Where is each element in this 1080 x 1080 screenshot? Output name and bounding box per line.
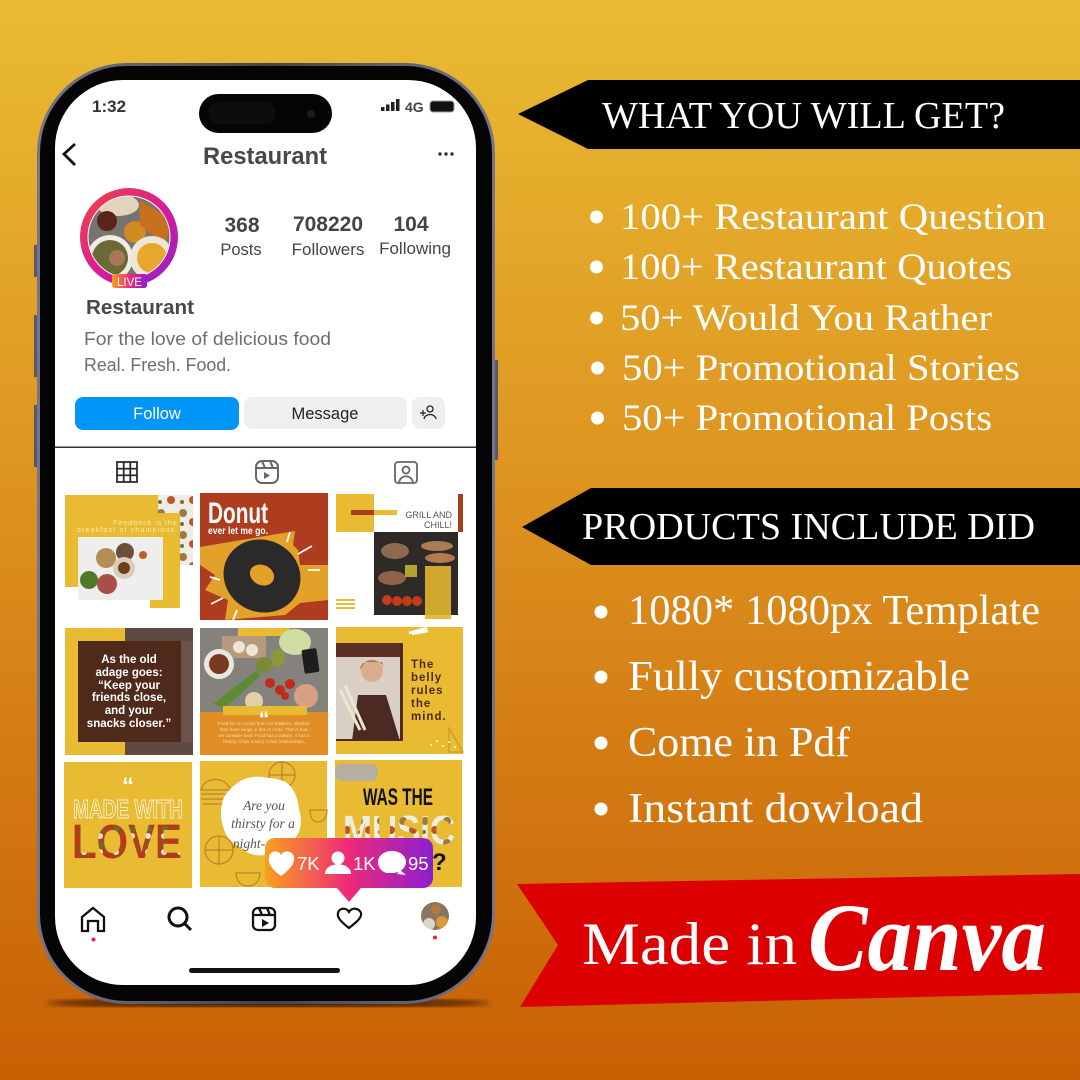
list: what you will get: 100+ Restaurant Question [620, 197, 1046, 238]
home indicator [189, 968, 340, 973]
post 5: food flat lay: we consider food. Food has a culture. It has a [218, 733, 310, 738]
followers count: 1K [353, 853, 376, 874]
tab icon: tagged [395, 462, 417, 483]
live badge: LIVE [117, 277, 142, 289]
status time: 1:32 [92, 97, 126, 116]
post 6: belly rules the mind: rules [411, 685, 444, 697]
bio: Real. Fresh. Food. [84, 355, 231, 375]
nav: search [169, 908, 191, 930]
banner: products include [522, 488, 1080, 565]
tab icon: reels [256, 461, 278, 483]
post 2: donut: ever let me go. [208, 525, 268, 537]
back chevron [64, 144, 75, 165]
list: products include: Instant dowload [628, 786, 923, 832]
bio: Restaurant [86, 297, 194, 319]
post 8: thirsty: thirsty for a [231, 816, 295, 831]
post 3: grill and chill [336, 493, 463, 620]
avatar [80, 188, 178, 289]
post 5: food flat lay: “ [259, 708, 269, 731]
post 3: grill and chill: CHILL! [424, 520, 452, 530]
post 2: donut: Donut [208, 497, 268, 530]
list: products include [594, 588, 1040, 832]
post 8: thirsty: Are you [242, 798, 285, 813]
post 8: thirsty: night- [233, 836, 266, 851]
follow button [75, 397, 239, 430]
profile title: Restaurant [203, 143, 327, 170]
post 7: made with love: “ [122, 773, 134, 800]
nav: profile avatar [420, 902, 450, 930]
post 7: made with love: LOVE [72, 816, 182, 869]
post 3: grill and chill: GRILL AND [405, 510, 452, 520]
profile stats: 708220 [293, 213, 363, 236]
post 6: belly rules the mind [336, 627, 463, 754]
profile divider [55, 446, 476, 448]
post 9: was the music: WAS THE [363, 784, 433, 811]
nav notification dots [92, 936, 437, 942]
bio [84, 297, 331, 375]
post 1: feedback: Feedback is the [113, 518, 177, 527]
post 4: old adage: “Keep your [98, 680, 161, 692]
post 5: food flat lay [200, 628, 328, 755]
screen [55, 80, 476, 985]
list: what you will get [590, 197, 1046, 439]
nav: reels [253, 908, 275, 930]
add person button [412, 397, 445, 429]
comment icon [378, 851, 406, 875]
post 5: food flat lay: Food for us comes from our relatives, whether [218, 721, 310, 726]
banner: what you will get: WHAT YOU WILL GET? [602, 95, 1005, 137]
post 6: belly rules the mind: mind. [411, 711, 447, 723]
post 4: old adage: and your [105, 705, 154, 717]
likes count: 7K [297, 853, 320, 874]
ribbon: made in canva: Made in [582, 911, 797, 977]
profile stats: 104 [393, 213, 429, 236]
post 9: was the music: MUSIC [343, 807, 455, 853]
post 7: made with love: MADE WITH [73, 794, 183, 824]
status icons [381, 99, 454, 115]
list: what you will get: 100+ Restaurant Quotes [620, 247, 1012, 288]
nav: heart [338, 909, 361, 928]
post 5: food flat lay: history. It has a story. It has relationships. [223, 739, 305, 744]
post 9: was the music: ? [432, 849, 447, 876]
post 6: belly rules the mind: The [411, 659, 434, 671]
phone bezel [40, 66, 492, 1001]
list: what you will get: 50+ Would You Rather [620, 298, 992, 339]
message button: Message [292, 405, 358, 423]
status icons: 4G [405, 99, 424, 115]
ribbon: made in canva: Canva [808, 884, 1046, 991]
profile stats: 368 [224, 214, 260, 237]
post 4: old adage: snacks closer.” [87, 718, 171, 730]
banner: products include: PRODUCTS INCLUDE DID [582, 506, 1035, 548]
more dots [438, 152, 454, 156]
post 1: feedback [65, 494, 193, 620]
phone mockup [34, 63, 498, 1006]
post 8: thirsty [200, 761, 327, 887]
follower icon [325, 852, 351, 874]
post 4: old adage: adage goes: [95, 667, 163, 679]
list: what you will get: 50+ Promotional Stories [622, 348, 1020, 389]
post 1: feedback: breakfast of champions. [77, 527, 177, 534]
message button [244, 397, 407, 429]
banner: what you will get [518, 80, 1080, 149]
profile stats: Posts [220, 241, 262, 259]
phone shadow [46, 1000, 490, 1006]
post 6: belly rules the mind: belly [411, 672, 442, 684]
post 4: old adage: As the old [101, 654, 157, 666]
post 6: belly rules the mind: the [411, 698, 431, 710]
tab icon: grid [117, 462, 137, 482]
list: products include: Fully customizable [628, 654, 970, 700]
bio: For the love of delicious food [84, 329, 331, 349]
post 5: food flat lay: they have wings or fins or roots. That is how [220, 727, 309, 732]
follow button: Follow [133, 405, 181, 423]
post 4: old adage: friends close, [92, 692, 166, 704]
profile stats [220, 213, 451, 259]
nav: home [82, 908, 104, 931]
phone frame [37, 63, 495, 1004]
list: what you will get: 50+ Promotional Posts [622, 398, 992, 439]
post 4: old adage [65, 628, 193, 755]
post 2: donut [200, 493, 328, 625]
heart icon [269, 851, 294, 876]
list: products include: 1080* 1080px Template [628, 588, 1040, 634]
post 9: was the music [335, 760, 462, 887]
engagement bubble [265, 838, 433, 902]
post 7: made with love [64, 762, 192, 888]
list: products include: Come in Pdf [628, 720, 850, 766]
side buttons [34, 245, 498, 467]
dynamic island [199, 94, 332, 133]
profile stats: Following [379, 239, 451, 258]
profile stats: Followers [292, 240, 364, 259]
ribbon: made in canva [517, 874, 1080, 1007]
comments count: 95 [408, 853, 429, 874]
